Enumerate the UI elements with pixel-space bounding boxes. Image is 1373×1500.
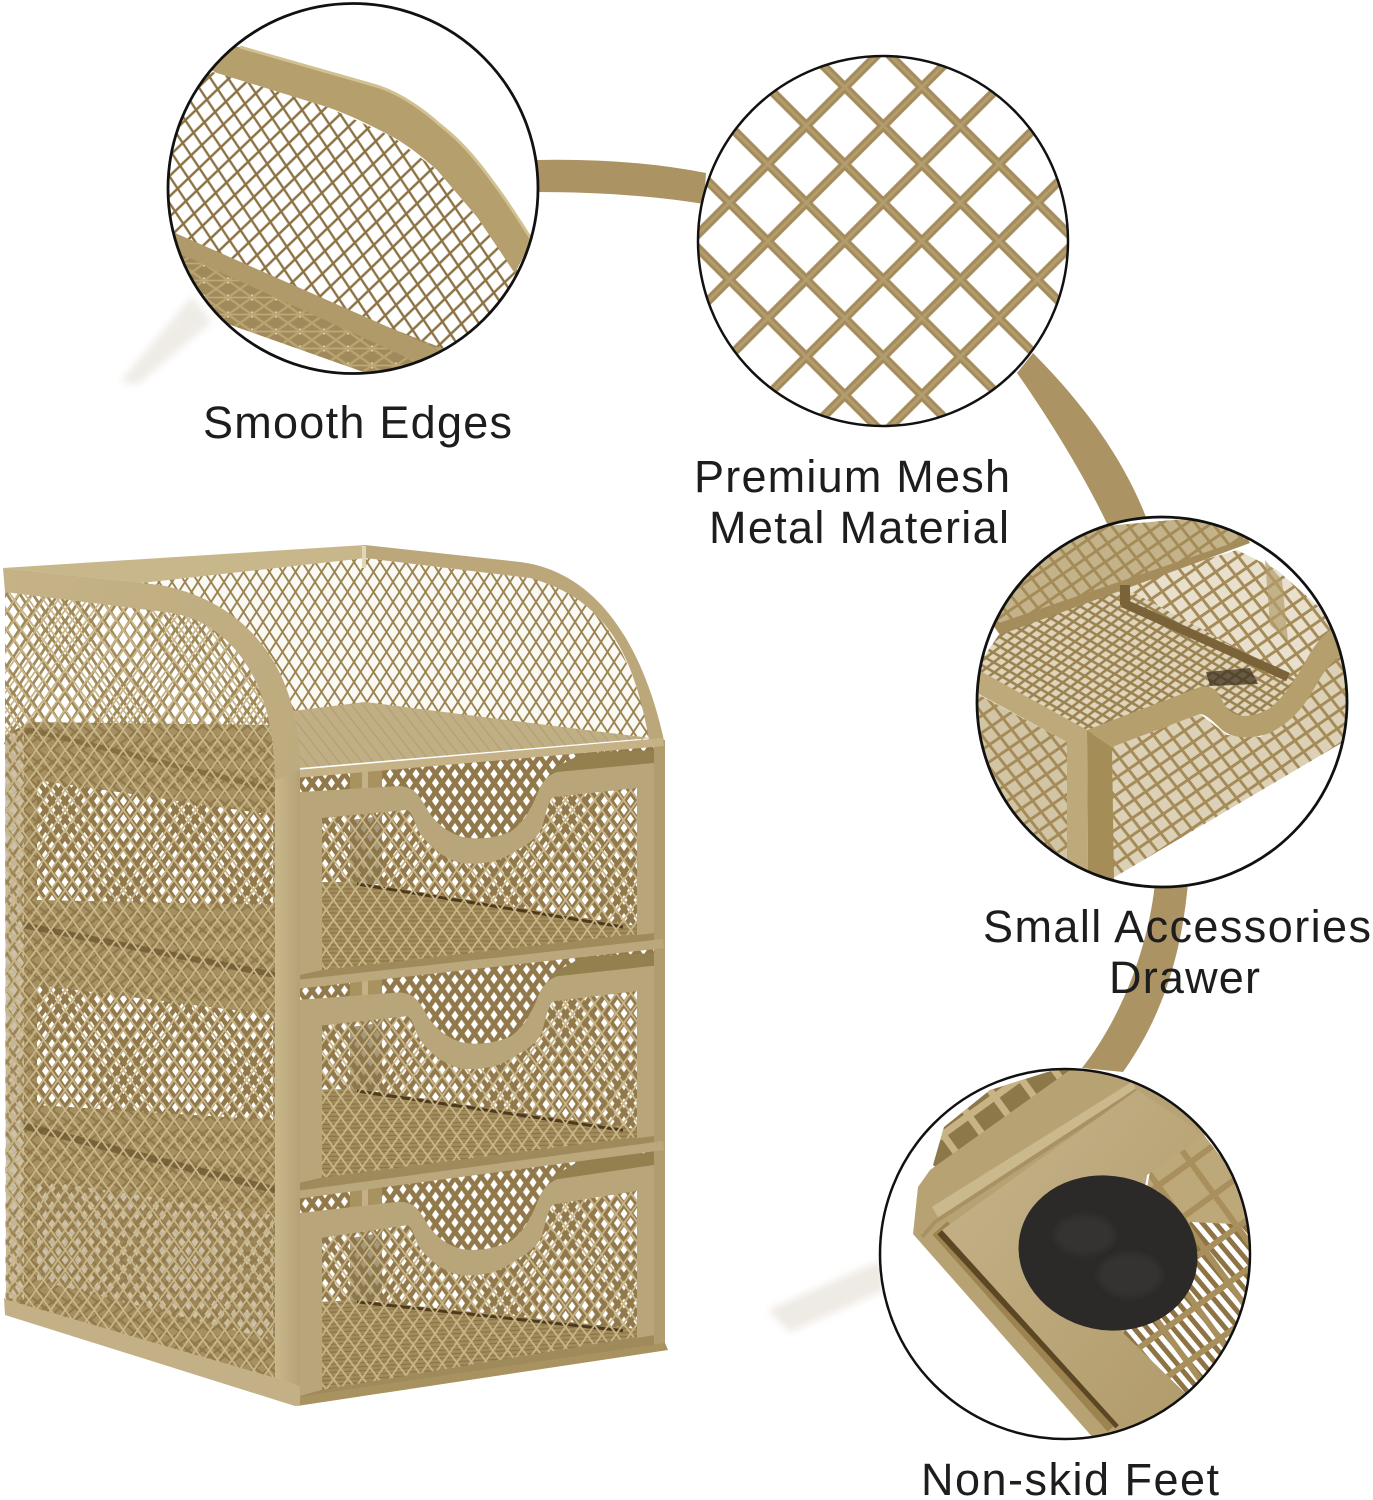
label: premium mesh metal material [694, 451, 1010, 553]
top shelf [285, 702, 650, 768]
circle: non-skid feet detail [880, 1060, 1270, 1440]
circle: premium mesh detail [698, 56, 1068, 426]
frame post [1087, 730, 1114, 880]
label: smooth edges: Smooth Edges [203, 397, 512, 448]
right frame post [654, 740, 665, 1350]
drawer cavity backing [298, 742, 662, 1398]
felt pad [1004, 1159, 1212, 1347]
label: small accessories drawer [983, 901, 1371, 1003]
front mesh [1112, 645, 1350, 878]
back panel mesh [140, 558, 650, 740]
label: small accessories drawer: Drawer [1109, 952, 1260, 1003]
left frame [3, 568, 300, 1405]
circle: small accessories drawer detail [970, 515, 1352, 887]
product: gold mesh drawer organizer [3, 545, 668, 1406]
frame left [975, 668, 1088, 875]
right mesh stripes [1122, 1222, 1260, 1395]
front post [275, 770, 300, 1405]
top left mesh [933, 1070, 1070, 1166]
label: small accessories drawer: Small Accessories [983, 901, 1371, 952]
rail [993, 538, 1250, 635]
dark inner rail [1123, 603, 1288, 677]
label: premium mesh metal material: Metal Material [709, 502, 1009, 553]
band: connector between drawer and non-skid feet [1082, 883, 1188, 1072]
circle: smooth edges detail [150, 4, 540, 385]
side panel mesh [5, 592, 275, 1378]
back rim [140, 545, 665, 745]
left mesh [978, 694, 1067, 859]
right mesh lit area [1120, 1136, 1246, 1333]
floor mesh [975, 587, 1310, 735]
frame front [1087, 625, 1352, 747]
shadow: soft streak by smooth edges [120, 296, 212, 384]
corner groove [940, 1228, 1115, 1425]
band: connector between premium mesh and drawer [1017, 353, 1150, 530]
inner drawer silhouettes [5, 592, 275, 1340]
label: premium mesh metal material: Premium Mesh [694, 451, 1010, 502]
outer rim highlight [935, 1087, 1135, 1212]
shelf edges [296, 738, 668, 1406]
shadow: soft streak by non-skid feet [768, 1260, 884, 1332]
base band [4, 1298, 300, 1406]
drawer 3 [296, 1147, 662, 1396]
metal corner frame [913, 1060, 1205, 1440]
upper mesh [996, 519, 1249, 624]
drawer 2 [296, 948, 662, 1183]
drawer 1 [296, 745, 662, 975]
rear right mesh [1130, 550, 1330, 679]
corner plate [942, 1090, 1205, 1432]
band: connector between smooth edges and premium mesh [536, 160, 706, 204]
